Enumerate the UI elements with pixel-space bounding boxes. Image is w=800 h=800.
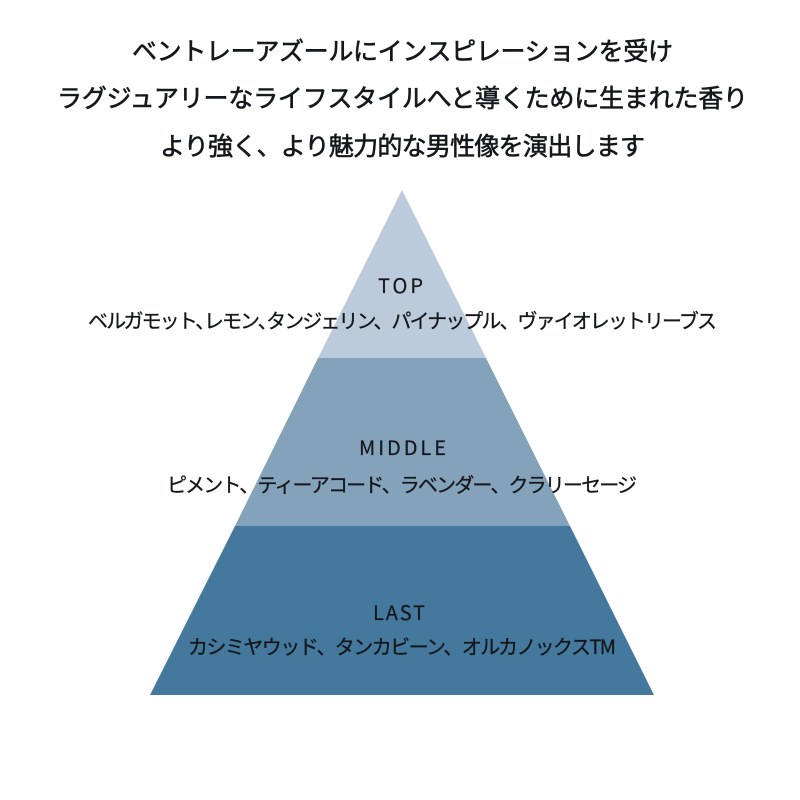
text block: middle notes: ピメント、ティーアコード、ラベンダー、クラリーセージ bbox=[167, 469, 637, 498]
text block: last notes: LAST bbox=[373, 597, 425, 626]
panel: middle tier of pyramid bbox=[235, 358, 570, 526]
title: three-line heading: より強く、より魅力的な男性像を演出します bbox=[160, 133, 645, 161]
title: three-line heading: ラグジュアリーなライフスタイルへと導くために生まれた香り bbox=[57, 85, 748, 113]
text block: middle notes bbox=[167, 432, 637, 498]
text block: top notes: ベルガモット､レモン､タンジェリン、パイナップル、ヴァイオレットリーブス bbox=[88, 305, 717, 334]
text block: last notes bbox=[188, 597, 616, 660]
text block: middle notes: MIDDLE bbox=[359, 432, 446, 461]
panel: top tier of pyramid bbox=[318, 190, 486, 358]
title: three-line heading: ベントレーアズールにインスピレーションを受け bbox=[132, 38, 673, 66]
text block: top notes: TOP bbox=[378, 270, 423, 299]
text block: last notes: カシミヤウッド、タンカビーン、オルカノックスTM bbox=[188, 631, 616, 660]
title: three-line heading bbox=[57, 38, 748, 161]
text block: top notes bbox=[88, 270, 717, 334]
panel: last tier of pyramid bbox=[150, 526, 654, 695]
